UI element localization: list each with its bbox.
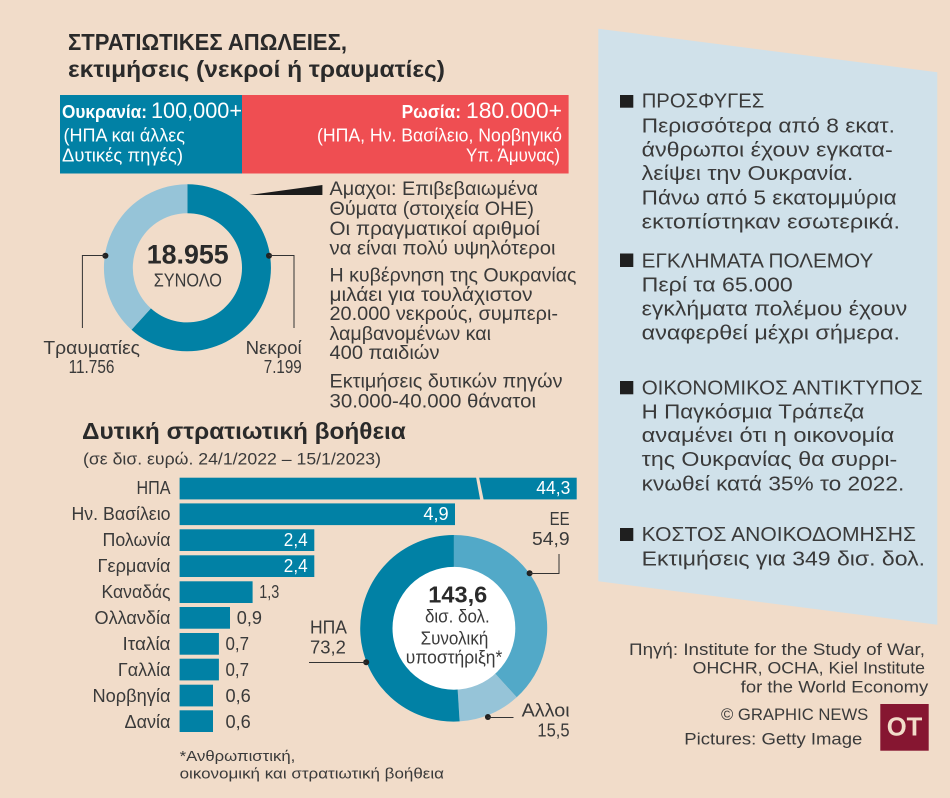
panel: Ukraine losses bar: Δυτικές πηγές) [62,145,183,166]
section: war crimes: ΕΓΚΛΗΜΑΤΑ ΠΟΛΕΜΟΥ [642,249,874,272]
bar chart: aid by country: ΗΠΑ [136,477,171,498]
title: military losses [68,29,445,82]
section: economic impact: ΟΙΚΟΝΟΜΙΚΟΣ ΑΝΤΙΚΤΥΠΟΣ [642,376,923,399]
bar chart: aid by country: Ιταλία [122,633,171,654]
text block: civilians estimates: μιλάει για τουλάχιστον [330,285,532,306]
text block: civilians estimates: Εκτιμήσεις δυτικών πηγών [330,372,562,393]
section: refugees: λείψει την Ουκρανία. [642,162,853,185]
callout: dead label [246,253,302,377]
section: war crimes: αναφερθεί μέχρι σήμερα. [642,321,900,344]
section: refugees: εκτοπίστηκαν εσωτερικά. [642,210,900,233]
panel: Ukraine losses bar: 100,000+ [151,98,242,123]
callout: others share [485,700,570,741]
bar chart: aid by country: 2,4 [284,555,308,576]
chart: total support donut [360,535,547,722]
section: reconstruction cost: ΚΟΣΤΟΣ ΑΝΟΙΚΟΔΟΜΗΣΗΣ [642,523,916,546]
bar chart: aid by country: Νορβηγία [92,685,171,706]
callout: dead label: 7.199 [264,356,302,377]
section: war crimes: εγκλήματα πολέμου έχουν [642,298,907,321]
section: reconstruction cost: Εκτιμήσεις για 349 δισ. δολ. [642,548,925,570]
source credits: Πηγή: Institute for the Study of War, [629,640,925,659]
bar chart: aid by country: 0,7 [226,633,249,654]
arrow: wedge pointer [249,185,322,195]
bar chart: aid by country: Καναδάς [102,581,171,602]
panel: Russia losses bar: Υπ. Άμυνας) [466,145,560,166]
text block: civilians estimates: 20.000 νεκρούς, συμπερι- [330,304,558,325]
panel: Russia losses bar: 180.000+ [466,98,562,123]
bar chart: aid by country: Γαλλία [118,659,171,680]
panel: Ukraine losses bar: Ουκρανία: [62,102,147,122]
section: war crimes [620,249,907,344]
bar chart: aid by country: 0,6 [226,685,251,706]
heading: western military aid [82,418,406,468]
text block: civilians estimates [330,179,576,413]
source credits: OHCHR, OCHA, Kiel Institute [693,659,925,678]
bar chart: aid by country: 44,3 [536,477,570,498]
bar chart: aid by country: 0,7 [226,659,249,680]
section: refugees: ΠΡΟΣΦΥΓΕΣ [642,90,764,113]
footnote: οικονομική και στρατιωτική βοήθεια [180,765,444,782]
section: refugees [620,90,900,233]
bar chart: aid by country [72,477,577,732]
panel: Russia losses bar: (ΗΠΑ, Ην. Βασίλειο, Νορβηγικό [317,125,562,146]
callout: wounded label [43,253,140,377]
chart: total support donut: Συνολική [421,628,488,648]
callout: EU share [527,508,570,576]
bar chart: aid by country: 2,4 [284,529,308,550]
callout: USA share: ΗΠΑ [310,616,348,637]
logo: OT [880,704,929,751]
chart: total support donut: υποστήριξη* [406,647,502,667]
section: refugees: Περισσότερα από 8 εκατ. [642,115,895,138]
section: economic impact: αναμένει ότι η οικονομία [642,424,894,447]
bar chart: aid by country: Ην. Βασίλειο [72,503,170,524]
text block: civilians estimates: Οι πραγματικοί αριθμοί [330,219,541,240]
callout: USA share [309,616,369,665]
chart: casualties donut: ΣΥΝΟΛΟ [154,271,222,291]
bar chart: aid by country: Ολλανδία [94,607,171,628]
logo: OT: OT [887,712,922,742]
panel: Ukraine losses bar [60,95,242,174]
footnote: *Ανθρωπιστική, [180,748,295,765]
heading: western military aid: (σε δισ. ευρώ. 24/1/2022 – 15/1/2023) [83,450,381,468]
text block: civilians estimates: Θύματα (στοιχεία ΟΗΕ) [330,199,534,220]
source credits [629,640,929,748]
chart: casualties donut [104,184,271,351]
callout: others share: 15,5 [537,720,570,741]
source credits: Pictures: Getty Image [684,729,862,748]
section: economic impact [620,376,923,495]
bar chart: aid by country: 1,3 [259,581,279,602]
bar chart: aid by country: 0,6 [226,711,251,732]
section: reconstruction cost [620,523,925,570]
section: refugees: άνθρωποι έχουν εγκατα- [642,138,893,161]
section: economic impact: της Ουκρανίας θα συρρι- [642,448,897,471]
text block: civilians estimates: Η κυβέρνηση της Ουκρανίας [330,266,576,287]
panel: key facts [598,29,937,625]
chart: casualties donut: 18.955 [147,239,229,269]
callout: EU share: ΕΕ [550,508,570,529]
bar chart: aid by country: Δανία [124,711,171,732]
source credits: © GRAPHIC NEWS [721,705,868,724]
bar chart: aid by country: 0,9 [237,607,262,628]
section: war crimes: Περί τα 65.000 [642,274,793,296]
title: military losses: ΣΤΡΑΤΙΩΤΙΚΕΣ ΑΠΩΛΕΙΕΣ, [68,29,347,55]
heading: western military aid: Δυτική στρατιωτική βοήθεια [82,418,406,444]
text block: civilians estimates: 400 παιδιών [330,343,440,364]
panel: Ukraine losses bar: (ΗΠΑ και άλλες [64,125,185,146]
callout: wounded label: 11.756 [69,356,114,377]
bar chart: aid by country: Γερμανία [98,555,171,576]
callout: dead label: Νεκροί [246,337,302,358]
callout: EU share: 54,9 [532,528,570,549]
title: military losses: εκτιμήσεις (νεκροί ή τραυματίες) [68,56,445,82]
callout: USA share: 73,2 [310,636,346,657]
section: economic impact: Η Παγκόσμια Τράπεζα [642,400,864,423]
source credits: for the World Economy [741,678,929,697]
bar chart: aid by country: 4,9 [423,503,449,524]
chart: total support donut: δισ. δολ. [425,607,490,627]
text block: civilians estimates: λαμβανομένων και [330,324,491,345]
text block: civilians estimates: 30.000-40.000 θάνατοι [330,392,536,413]
text block: civilians estimates: Αμαχοι: Επιβεβαιωμένα [330,179,538,200]
section: refugees: Πάνω από 5 εκατομμύρια [642,187,897,210]
text block: civilians estimates: να είναι πολύ υψηλότεροι [330,238,556,260]
panel: Russia losses bar [242,95,569,174]
panel: Russia losses bar: Ρωσία: [402,102,461,122]
footnote [180,748,444,782]
section: economic impact: κνωθεί κατά 35% το 2022. [642,472,904,495]
callout: wounded label: Τραυματίες [43,337,140,358]
callout: others share: Αλλοι [522,700,570,721]
chart: total support donut: 143,6 [428,581,487,607]
bar chart: aid by country: Πολωνία [102,529,171,550]
